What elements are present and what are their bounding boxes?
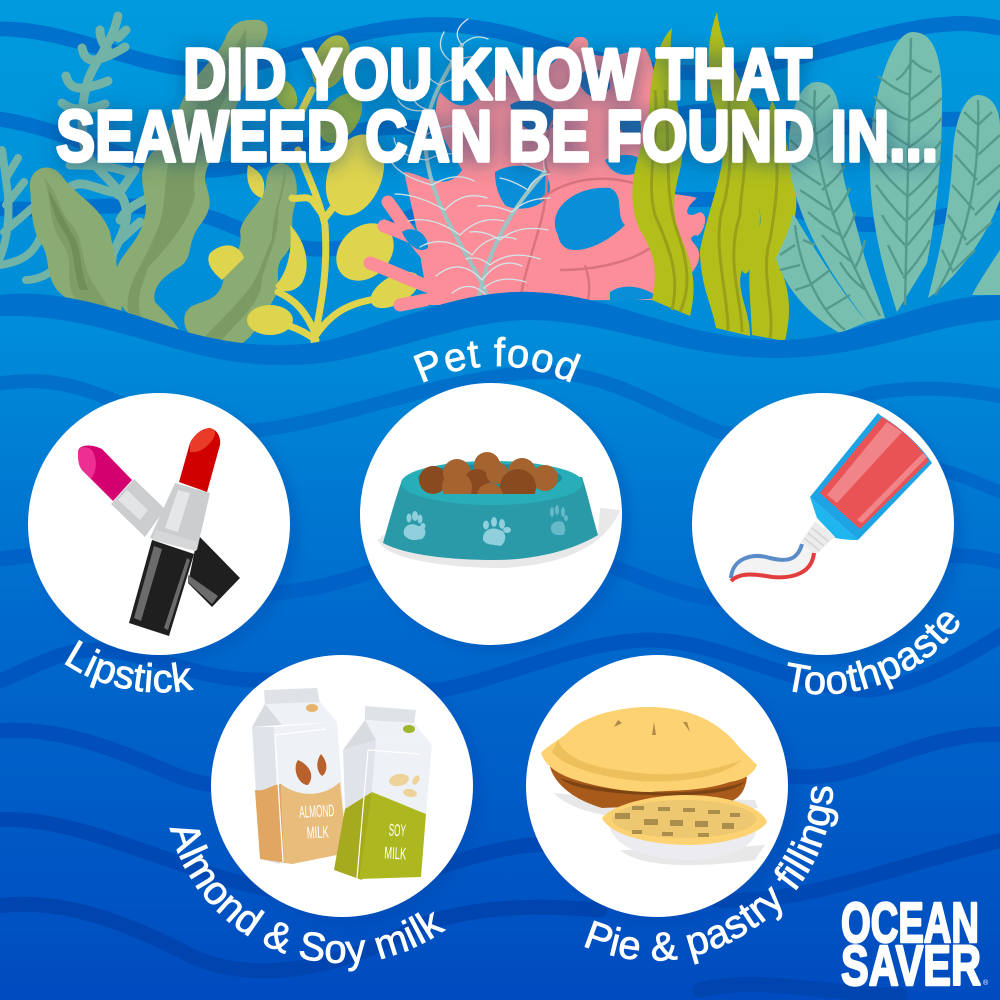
icon: almond milk carton: ALMOND	[299, 801, 335, 822]
label: Pet food: Pet food	[413, 336, 582, 382]
icon: large pie	[541, 707, 758, 816]
kibble	[419, 452, 558, 494]
seaweed: pink coral	[370, 19, 705, 305]
lower wave bands	[0, 372, 1000, 995]
icon: pet bowl	[378, 452, 620, 568]
panel: almond and soy milk	[211, 655, 482, 926]
lower water layer	[0, 292, 1000, 1000]
seaweed: green wavy kelp	[632, 12, 796, 341]
logo: Ocean Saver: ®	[983, 979, 989, 987]
panel: lipstick	[28, 393, 299, 664]
title	[56, 35, 938, 177]
label: Almond and Soy milk: Almond & Soy milk	[169, 828, 446, 972]
icon: almond milk carton	[252, 688, 347, 864]
icon: lipsticks	[78, 428, 240, 636]
panel: toothpaste	[692, 393, 963, 664]
logo: Ocean Saver	[841, 891, 989, 998]
icon: small pie	[602, 795, 767, 865]
kelp leaf 3	[184, 163, 297, 345]
panel: pet food	[360, 383, 631, 654]
kelp leaf 2	[115, 20, 268, 334]
coral fingers	[370, 202, 450, 305]
icon: toothpaste tube	[731, 413, 932, 581]
label: Pie and pastry fillings: Pie & pastry fillings	[584, 786, 838, 965]
icon: soy milk carton	[334, 706, 432, 880]
paws	[404, 505, 568, 546]
label: Lipstick: Lipstick	[64, 640, 194, 693]
icon: almond milk carton: MILK	[306, 822, 330, 843]
seaweed: teal fern, left	[0, 16, 144, 280]
panel: pie and pastry	[526, 655, 797, 926]
icon: soy milk carton: MILK	[384, 843, 407, 864]
wave band under seaweed	[0, 292, 1000, 365]
coral holes	[402, 155, 660, 302]
yellow leaves	[208, 126, 425, 335]
title: DID YOU KNOW THAT	[183, 35, 812, 115]
seaweed: teal leaves	[776, 32, 1000, 333]
label: Toothpaste: Toothpaste	[788, 612, 960, 695]
kelp leaf 1	[30, 167, 122, 320]
upper wave bands	[0, 23, 1000, 249]
icon: soy milk carton: SOY	[388, 821, 406, 840]
seaweed: yellow plant	[208, 30, 425, 342]
seaweed: green kelp group	[30, 20, 297, 345]
sea feather strands	[392, 19, 550, 302]
